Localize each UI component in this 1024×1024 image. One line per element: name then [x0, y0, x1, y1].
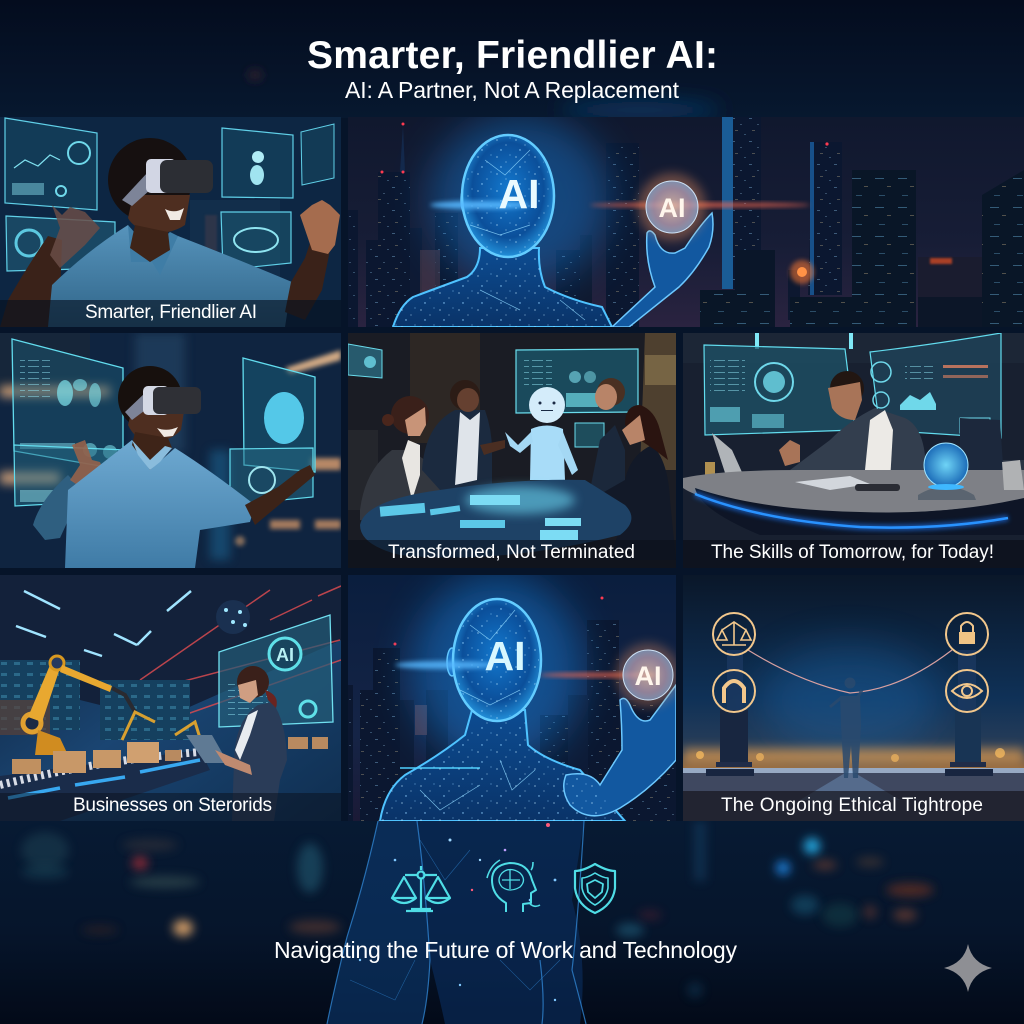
panel: AI hologram in city — [348, 117, 1024, 327]
icon: head with brain — [487, 860, 540, 912]
icon: shield — [575, 864, 615, 913]
factory ceiling and lights — [0, 575, 341, 740]
AI orb: AI — [634, 661, 662, 691]
wall holographic screens — [348, 344, 638, 447]
title: Smarter, Friendlier AI: — [307, 34, 718, 77]
lens flare — [395, 643, 680, 707]
icon: sparkle watermark — [944, 944, 992, 992]
ghost AI figure continuing below the panels — [327, 821, 586, 1024]
icon: scales circle — [713, 613, 755, 655]
caption band — [348, 540, 676, 568]
left pillar — [706, 650, 754, 776]
panel: person with VR and holograms — [0, 333, 341, 568]
caption: The Skills of Tomorrow: The Skills of Tomorrow, for Today! — [711, 542, 994, 563]
AI text on head: AI — [484, 633, 526, 679]
holographic screens — [704, 333, 1001, 438]
icon: eye circle — [946, 670, 988, 712]
conveyor belt — [0, 750, 210, 821]
holographic screens — [12, 339, 315, 506]
AI orb — [646, 181, 698, 233]
tightrope — [748, 650, 952, 693]
orange light streaks — [0, 350, 341, 546]
woman colleague — [360, 396, 475, 530]
caption: Businesses on Sterorids: Businesses on Sterorids — [73, 795, 272, 816]
cardboard boxes — [12, 737, 328, 774]
silhouette figure on rope — [830, 678, 862, 778]
laptop — [705, 433, 800, 490]
AI text on head: AI — [498, 171, 540, 217]
tagline: Navigating the Future of Work and Technology — [274, 937, 738, 963]
businesswoman with tablet — [186, 666, 287, 821]
holographic screen: AI — [276, 645, 294, 665]
friendly robot — [505, 387, 578, 480]
right pillar — [945, 650, 993, 776]
panel: Transformed, Not Terminated — [348, 333, 676, 568]
caption band — [683, 540, 1024, 568]
holographic table — [360, 480, 631, 558]
AI orb: AI — [658, 193, 686, 223]
lens flare — [430, 173, 810, 241]
city skyline — [348, 117, 1024, 327]
panel: AI humanoid full body — [348, 575, 676, 821]
city skyline — [348, 596, 676, 821]
caption band — [0, 793, 341, 821]
panel: Businesses on Steroids factory — [0, 575, 341, 821]
man on right — [590, 378, 625, 500]
man in suit — [779, 371, 1004, 492]
caption band — [683, 791, 1024, 821]
caption: The Ongoing Ethical Tightrope: The Ongoing Ethical Tightrope — [721, 795, 983, 816]
AI orb — [623, 650, 673, 700]
icon: lock circle — [946, 613, 988, 655]
AI humanoid figure — [380, 575, 676, 821]
holographic brain on stand — [918, 443, 976, 500]
woman on right — [590, 405, 676, 560]
holographic screens — [5, 118, 334, 271]
person in VR headset — [0, 138, 340, 327]
panel: The Skills of Tomorrow — [683, 333, 1024, 568]
caption: Smarter, Friendlier AI: Smarter, Friendlier AI — [85, 302, 257, 323]
caption band — [0, 300, 341, 327]
panel: The Ongoing Ethical Tightrope — [683, 597, 1024, 821]
yellow robot arm — [23, 656, 200, 755]
title: AI: A Partner, Not A Replacement — [345, 77, 680, 103]
title — [307, 34, 718, 103]
panel: Smarter, Friendlier AI — [0, 117, 341, 327]
glowing horizon — [683, 645, 1024, 821]
holographic screen — [219, 615, 333, 727]
icon: balance scale — [392, 866, 450, 911]
icon: magnet circle — [713, 670, 755, 712]
curved desk with neon light — [683, 460, 1024, 535]
person in VR headset — [33, 366, 315, 568]
AI humanoid figure — [393, 115, 713, 327]
caption: Transformed, Not Terminated: Transformed, Not Terminated — [388, 542, 635, 563]
man colleague — [422, 380, 505, 490]
